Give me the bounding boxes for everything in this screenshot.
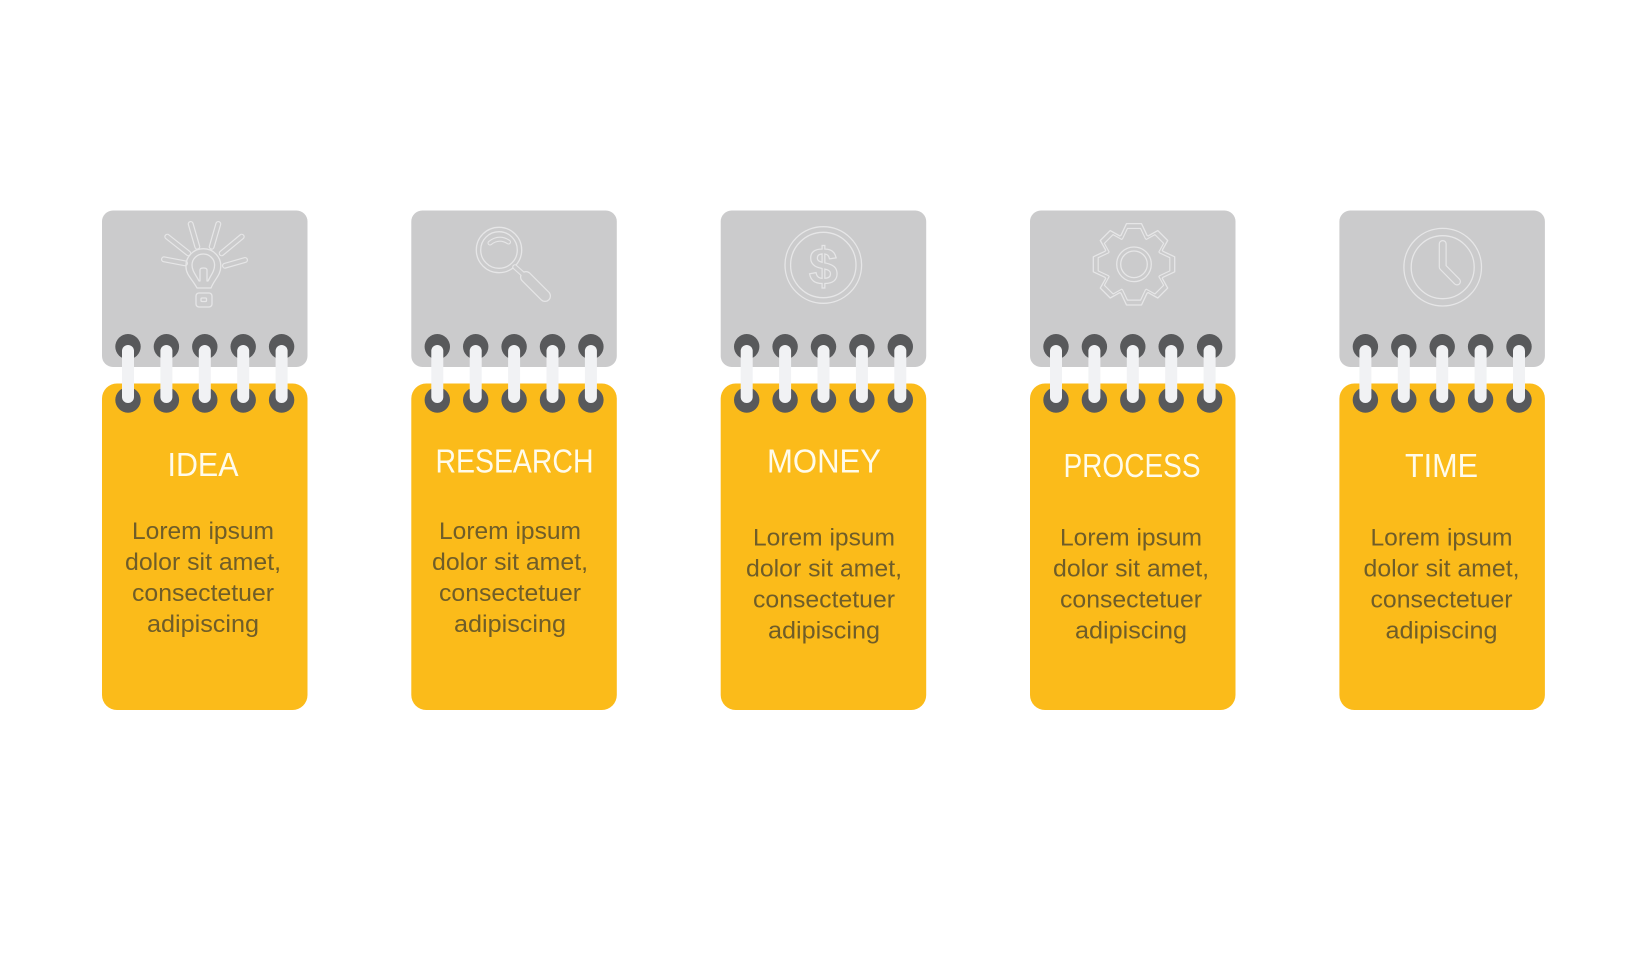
- text block: time description: dolor sit amet,: [1364, 555, 1520, 582]
- text block: research description: adipiscing: [454, 611, 566, 638]
- text block: research description: consectetuer: [439, 580, 581, 607]
- heading: process: PROCESS: [1064, 447, 1200, 484]
- heading: money: MONEY: [767, 442, 881, 480]
- heading: idea: IDEA: [168, 446, 238, 483]
- text block: money description: Lorem ipsum: [753, 524, 895, 551]
- heading: time: TIME: [1405, 447, 1478, 484]
- icon: light bulb: [164, 224, 245, 307]
- text block: process description: dolor sit amet,: [1053, 555, 1209, 582]
- text block: idea description: dolor sit amet,: [125, 549, 281, 576]
- panel: idea notepad: [102, 210, 308, 710]
- text block: time description: consectetuer: [1370, 586, 1512, 613]
- text block: idea description: consectetuer: [132, 580, 274, 607]
- text block: research description: dolor sit amet,: [432, 549, 588, 576]
- text block: research description: Lorem ipsum: [439, 518, 581, 545]
- gray top sheet: process: [1030, 210, 1236, 367]
- spiral binding: money: [734, 334, 913, 413]
- text block: time description: [1364, 524, 1520, 644]
- icon: clock: [1404, 228, 1481, 306]
- heading: research: RESEARCH: [436, 442, 594, 480]
- text block: time description: adipiscing: [1386, 617, 1498, 644]
- spiral binding: process: [1043, 334, 1222, 413]
- gray top sheet: idea: [102, 210, 308, 367]
- icon: dollar coin: [785, 227, 862, 303]
- yellow bottom sheet: time: [1339, 384, 1545, 710]
- yellow bottom sheet: research: [411, 384, 617, 710]
- spiral binding: research: [425, 334, 604, 413]
- panel: process notepad: [1030, 210, 1236, 710]
- text block: money description: adipiscing: [768, 617, 880, 644]
- text block: process description: consectetuer: [1060, 586, 1202, 613]
- text block: money description: consectetuer: [753, 586, 895, 613]
- icon: magnifying glass: [476, 227, 545, 296]
- gray top sheet: research: [411, 210, 617, 367]
- text block: process description: adipiscing: [1075, 617, 1187, 644]
- text block: idea description: Lorem ipsum: [132, 518, 274, 545]
- text block: process description: Lorem ipsum: [1060, 524, 1202, 551]
- text block: money description: dolor sit amet,: [746, 555, 902, 582]
- spiral binding: idea: [115, 334, 294, 413]
- text block: idea description: [125, 518, 281, 638]
- icon: dollar coin: $: [809, 238, 838, 296]
- yellow bottom sheet: idea: [102, 384, 308, 710]
- text block: time description: Lorem ipsum: [1370, 524, 1512, 551]
- text block: money description: [746, 524, 902, 644]
- yellow bottom sheet: process: [1030, 384, 1236, 710]
- panel: time notepad: [1339, 210, 1545, 710]
- text block: research description: [432, 518, 588, 638]
- text block: process description: [1053, 524, 1209, 644]
- gray top sheet: time: [1339, 210, 1545, 367]
- spiral binding: time: [1353, 334, 1532, 413]
- panel: research notepad: [411, 210, 617, 710]
- panel: money notepad: [721, 210, 926, 710]
- text block: idea description: adipiscing: [147, 611, 259, 638]
- yellow bottom sheet: money: [721, 384, 926, 710]
- gray top sheet: money: [721, 210, 926, 367]
- icon: gear: [1093, 224, 1175, 305]
